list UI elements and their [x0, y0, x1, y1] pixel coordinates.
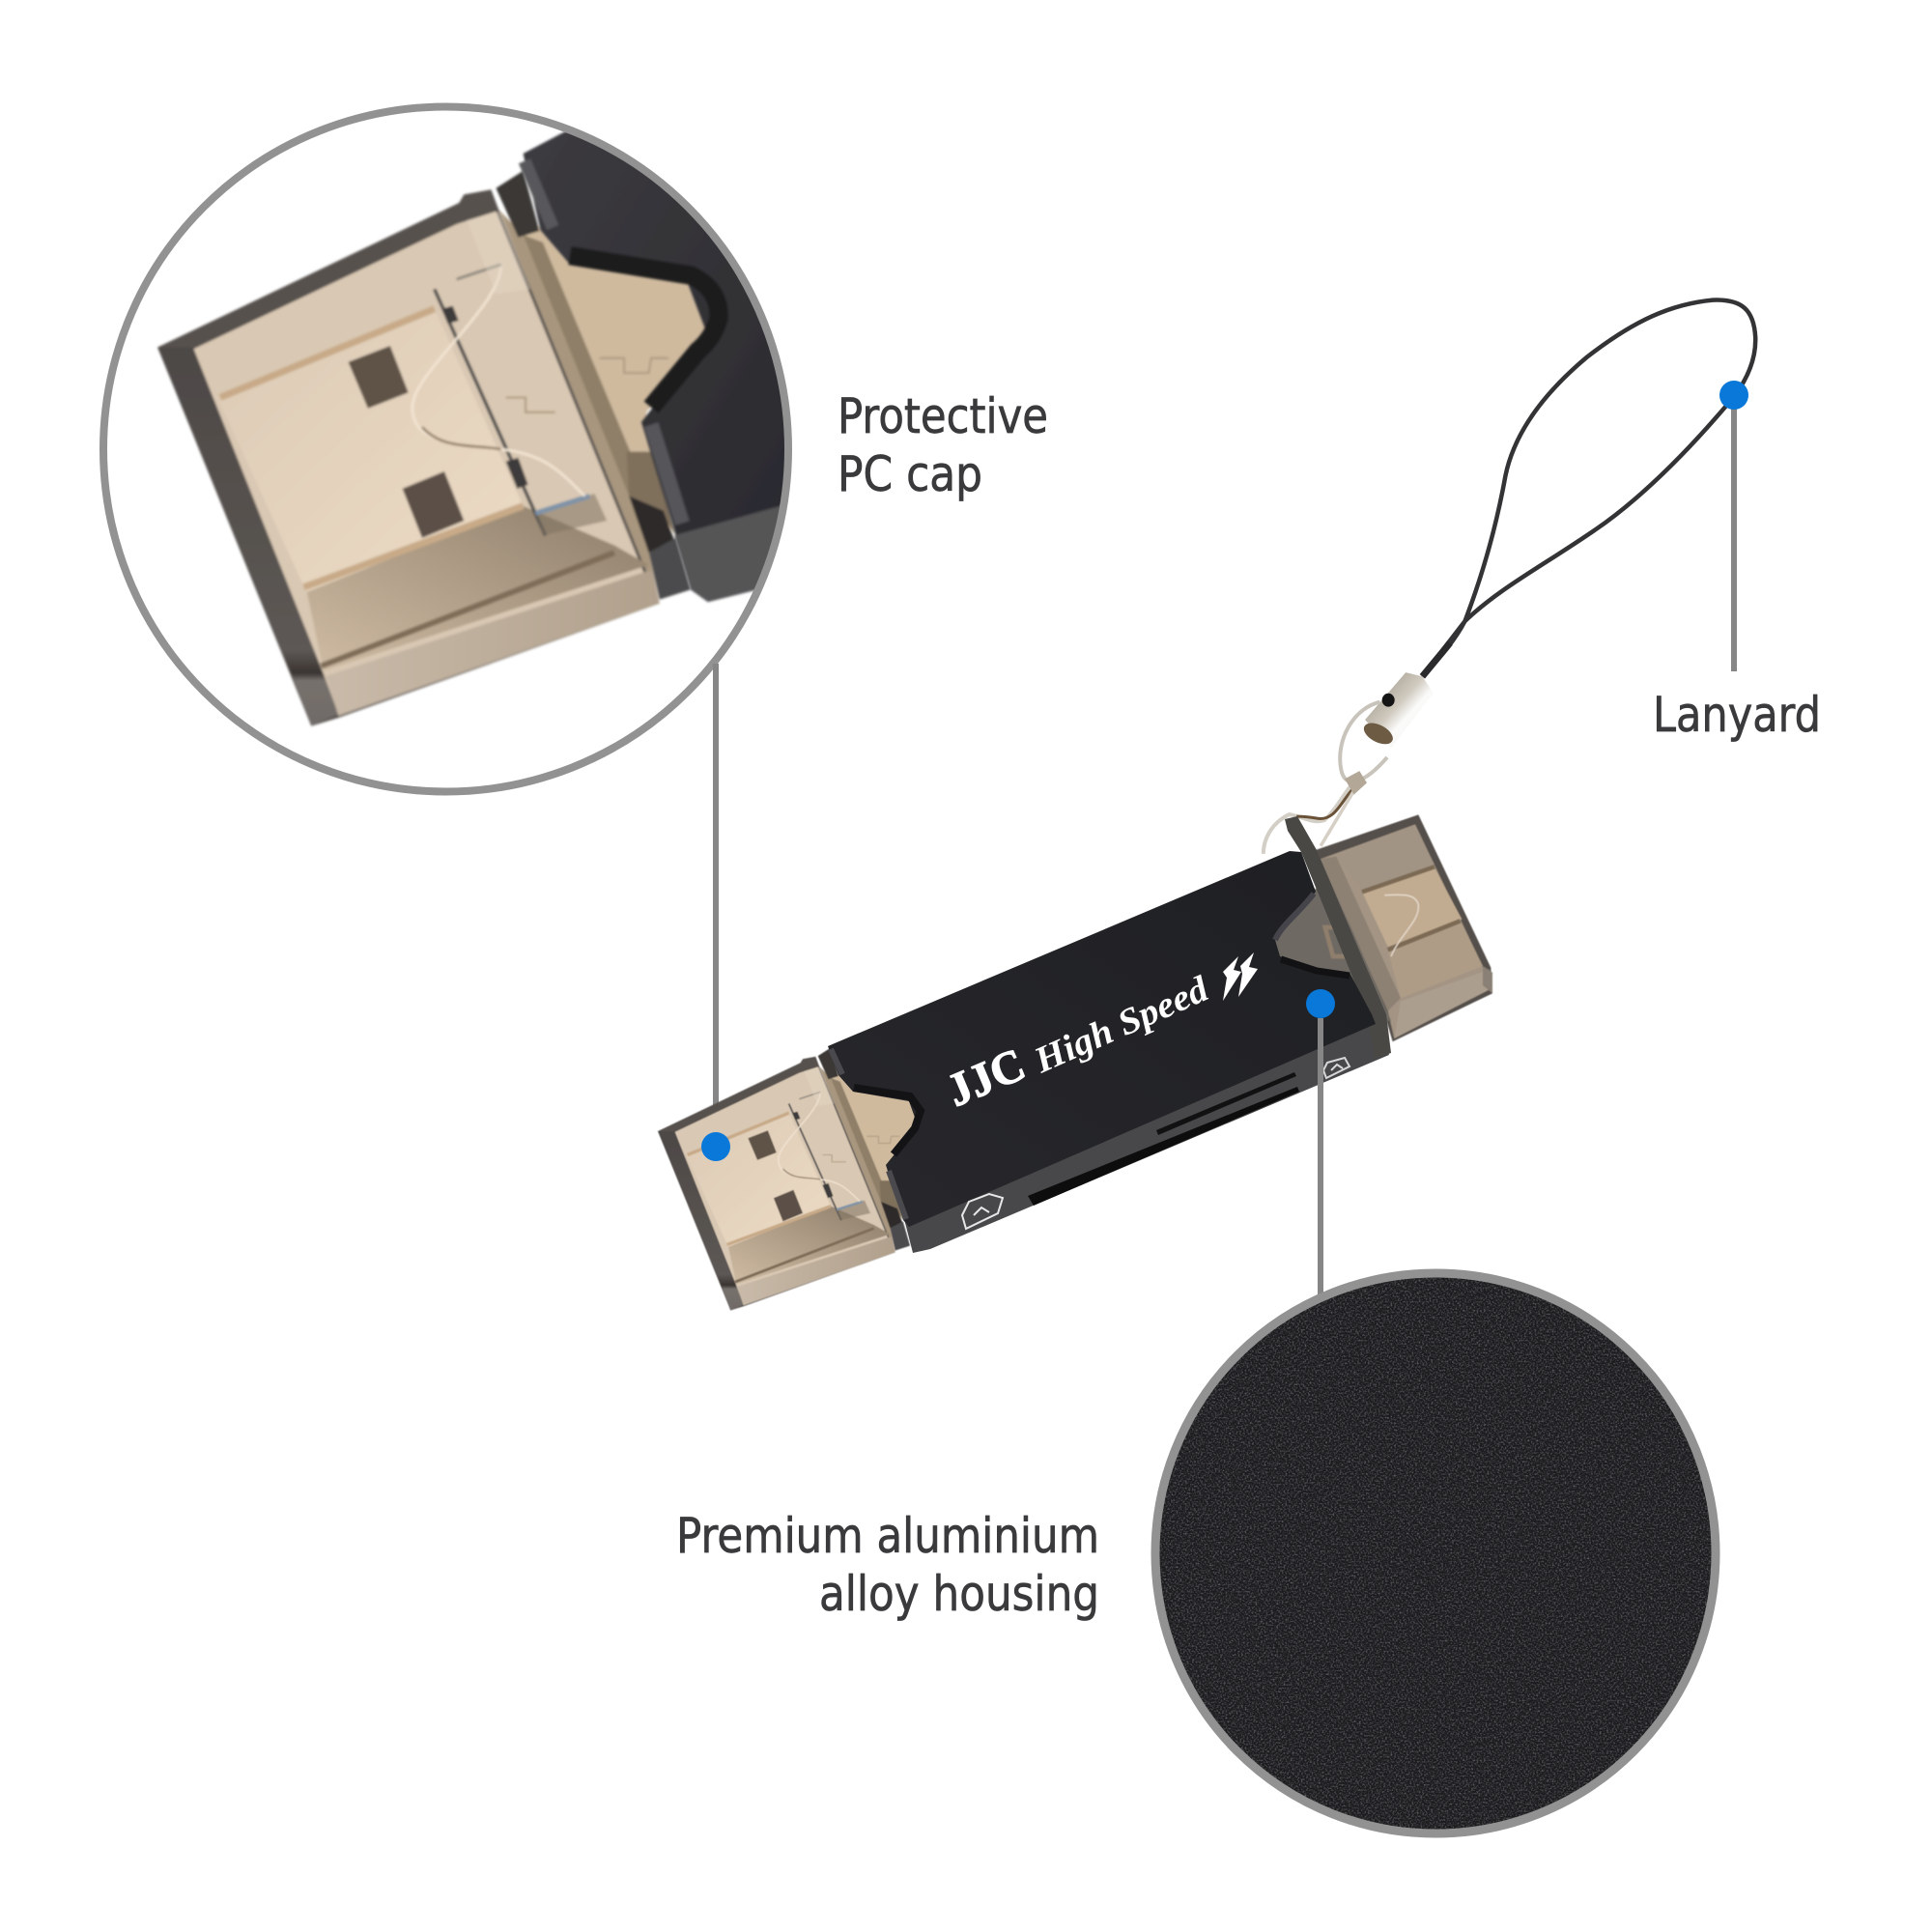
notch rims: [1275, 894, 1314, 940]
SD icon right: [1323, 1058, 1350, 1078]
label: Premium aluminium alloy housing: alloy housing: [819, 1566, 1099, 1622]
metal ring and clasp: [1340, 702, 1387, 781]
card slots: [1156, 1072, 1296, 1135]
leader line: cap: [713, 664, 719, 1147]
reader body: [828, 816, 1391, 1253]
label: Protective PC cap: PC cap: [838, 446, 982, 502]
left cap: [658, 1048, 923, 1310]
metal crimp: [1365, 672, 1434, 748]
leader line: lanyard: [1731, 395, 1737, 671]
enlarged cap and reader end: [157, 131, 816, 726]
lightning icon: [1223, 952, 1258, 1001]
card reader product: [658, 814, 1492, 1310]
label: Protective PC cap: Protective: [838, 388, 1048, 444]
grain texture: [1151, 1269, 1719, 1837]
right cap: [1272, 814, 1492, 1041]
label: Protective PC cap: [838, 388, 1048, 502]
callout circle: aluminium housing texture: [1151, 1269, 1719, 1837]
label: Premium aluminium alloy housing: Premium aluminium: [676, 1508, 1099, 1564]
lanyard: [1264, 300, 1755, 854]
callout circle: protective PC cap close-up: [102, 106, 816, 792]
logo JJC: JJC: [939, 1038, 1033, 1117]
leader line: housing: [1318, 1018, 1323, 1300]
grey side band: [903, 1016, 1389, 1253]
dot: cap: [701, 1132, 730, 1161]
High Speed script: High Speed: [1028, 968, 1215, 1082]
right collar: [1285, 816, 1391, 1059]
dot: housing: [1306, 989, 1335, 1018]
SD icon left: [962, 1194, 1003, 1229]
label: Premium aluminium alloy housing: [676, 1508, 1099, 1622]
label: Lanyard: Lanyard: [1653, 687, 1821, 743]
dot: lanyard: [1719, 381, 1748, 410]
black top face: [828, 851, 1376, 1227]
